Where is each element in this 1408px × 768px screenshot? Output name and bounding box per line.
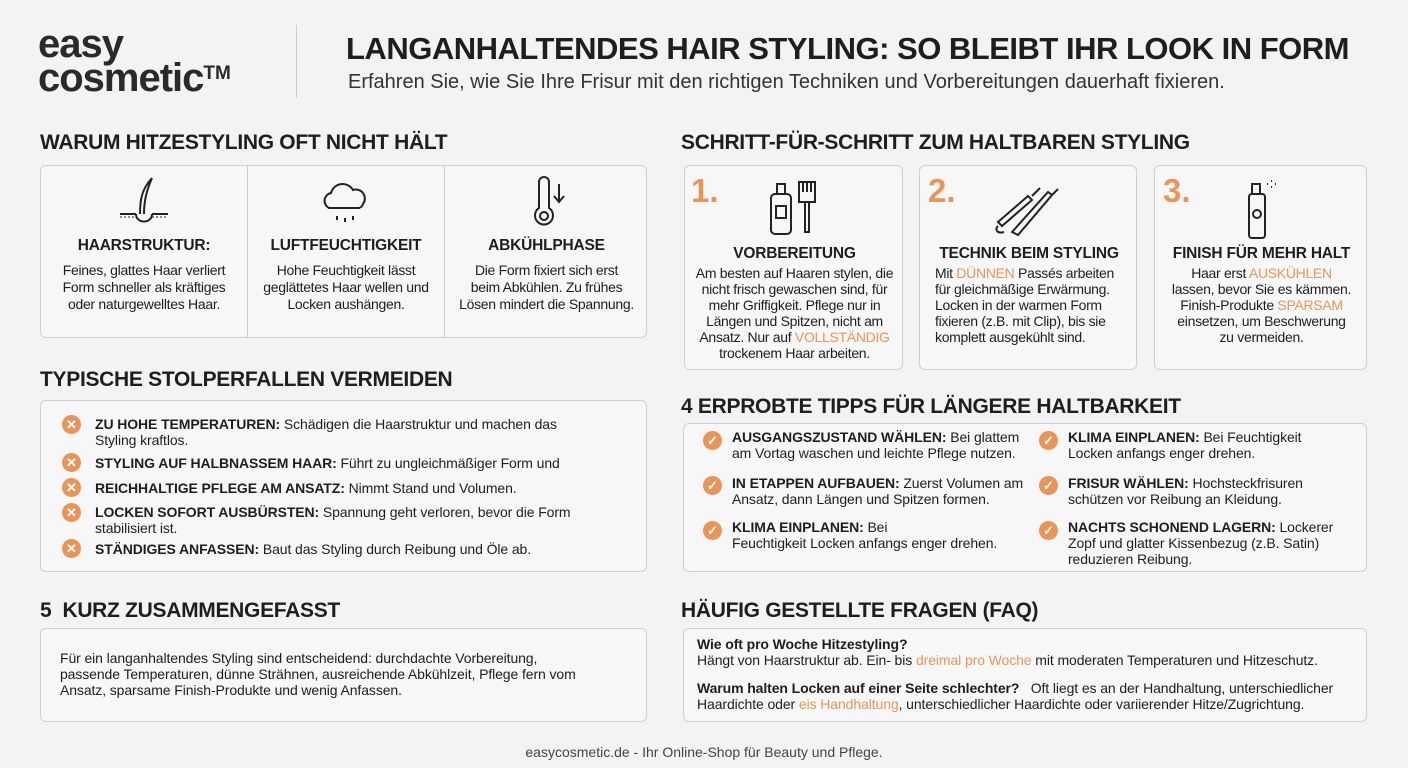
panel: stolperfallen: ZU HOHE TEMPERATUREN: Schädigen die Haarstruktur und machen das Styling kraftlos. [95,416,557,448]
text: haarstruktur [63,237,226,312]
icon: thermometer [534,176,565,226]
panel: stolperfallen: ✕ [66,505,77,520]
heading: schritt: SCHRITT-FÜR-SCHRITT ZUM HALTBAREN STYLING [681,131,1190,154]
logo: easy [38,22,123,66]
card 3: 3. [1163,172,1191,209]
panel: tipps: ✓ [1043,433,1054,448]
text: abkuehl: Die Form fixiert sich erst beim Abkühlen. Zu frühes Lösen mindert die Spannung. [459,262,634,312]
panel: stolperfallen: ✕ [66,417,77,432]
text: haarstruktur: HAARSTRUKTUR: [78,237,210,254]
panel: stolperfallen: ✕ [66,455,77,470]
text: luft: LUFTFEUCHTIGKEIT [271,237,421,254]
panel: stolperfallen: STÄNDIGES ANFASSEN: Baut das Styling durch Reibung und Öle ab. [95,541,531,557]
panel: faq: Warum halten Locken auf einer Seite schlechter? Oft liegt es an der Handhaltung, unterschiedlicher Haardichte oder eis Handhaltung, unterschiedlicher Haardichte oder variierender Hitze/Zugrichtung. [697,680,1333,712]
panel: tipps: ✓ [1043,523,1054,538]
card 1: VORBEREITUNG [733,245,856,262]
text: abkuehl [459,236,634,312]
panel: tipps: ✓ [1043,478,1054,493]
text: abkuehl: ABKÜHLPHASE [488,237,605,254]
card 3: FINISH FÜR MEHR HALT [1173,245,1350,262]
card 2: Mit DÜNNEN Passés arbeiten für gleichmäßige Erwärmung. Locken in der warmen Form fixieren (z.B. mit Clip), bis sie komplett ausgekühlt sind. [935,265,1114,345]
panel: tipps: IN ETAPPEN AUFBAUEN: Zuerst Volumen am Ansatz, dann Längen und Spitzen formen. [732,475,1023,507]
panel: faq: Hängt von Haarstruktur ab. Ein- bis dreimal pro Woche mit moderaten Temperaturen und Hitzeschutz. [697,652,1318,668]
card 2 [919,165,1137,370]
title: LANGANHALTENDES HAIR STYLING: SO BLEIBT IHR LOOK IN FORM [346,31,1349,66]
panel: faq: Wie oft pro Woche Hitzestyling? [697,636,907,652]
panel: tipps: Feuchtigkeit Locken anfangs enger drehen. [732,535,997,551]
logo: cosmeticTM [38,56,231,100]
card 1: Am besten auf Haaren stylen, die nicht frisch gewaschen sind, für mehr Griffigkeit. Pflege nur in Längen und Spitzen, nicht am Ansatz. Nur auf VOLLSTÄNDIG trockenem Haar arbeiten. [696,265,893,361]
panel: kurz: Für ein langanhaltendes Styling sind entscheidend: durchdachte Vorbereitung, passende Temperaturen, dünne Strähnen, ausreichende Abkühlzeit, Pflege fern vom Ansatz, sparsame Finish-Produkte und wenig Anfassen. [60,650,576,698]
logo [38,22,231,100]
card 1: 1. [691,172,719,209]
heading: stolperfallen: TYPISCHE STOLPERFALLEN VERMEIDEN [40,368,452,391]
panel: tipps [683,423,1367,572]
panel: warum [40,165,647,338]
panel: tipps: KLIMA EINPLANEN: Bei Feuchtigkeit Locken anfangs enger drehen. [1068,429,1301,461]
panel: stolperfallen [40,400,647,572]
text: haarstruktur: Feines, glattes Haar verliert Form schneller als kräftiges oder naturgewelltes Haar. [63,262,225,312]
subtitle: Erfahren Sie, wie Sie Ihre Frisur mit den richtigen Techniken und Vorbereitungen dauerhaft fixieren. [348,71,1225,93]
panel: tipps: ✓ [707,478,718,493]
panel: tipps: NACHTS SCHONEND LAGERN: Lockerer Zopf und glatter Kissenbezug (z.B. Satin) reduzieren Reibung. [1068,519,1333,567]
panel: stolperfallen: LOCKEN SOFORT AUSBÜRSTEN: Spannung geht verloren, bevor die Form stabilisiert ist. [95,504,570,536]
panel: stolperfallen: ✕ [66,541,77,556]
panel: faq [683,628,1367,722]
icon: hair [120,177,168,222]
heading: tipps: 4 ERPROBTE TIPPS FÜR LÄNGERE HALTBARKEIT [681,395,1181,418]
panel: tipps: ✓ [707,433,718,448]
panel: stolperfallen: STYLING AUF HALBNASSEM HAAR: Führt zu ungleichmäßiger Form und [95,455,560,471]
card 3 [1154,165,1367,370]
footer: easycosmetic.de - Ihr Online-Shop für Beauty und Pflege. [525,744,883,760]
panel: tipps: KLIMA EINPLANEN: Bei [732,519,887,535]
panel: stolperfallen: ✕ [66,480,77,495]
card 3: Haar erst AUSKÜHLEN lassen, bevor Sie es kämmen. Finish-Produkte SPARSAM einsetzen, um Beschwerung zu vermeiden. [1172,265,1351,345]
text: luft [263,237,429,312]
text: luft: Hohe Feuchtigkeit lässt geglättetes Haar wellen und Locken aushängen. [263,262,429,312]
icon: spray can [1248,180,1276,239]
card 2: TECHNIK BEIM STYLING [939,245,1119,262]
heading: faq: HÄUFIG GESTELLTE FRAGEN (FAQ) [681,599,1038,622]
panel: tipps: FRISUR WÄHLEN: Hochsteckfrisuren schützen vor Reibung an Kleidung. [1068,475,1303,507]
card 1 [684,165,903,370]
heading: warum: WARUM HITZESTYLING OFT NICHT HÄLT [40,131,447,154]
icon: bottle brush [770,181,816,235]
icon: irons [995,187,1059,236]
heading: kurz: 5 KURZ ZUSAMMENGEFASST [40,599,340,622]
card 2: 2. [928,172,956,209]
panel: kurz [40,628,647,722]
panel: tipps: AUSGANGSZUSTAND WÄHLEN: Bei glattem am Vortag waschen und leichte Pflege nutzen. [732,429,1019,461]
panel: tipps: ✓ [707,523,718,538]
icon: cloud [324,183,366,222]
panel: stolperfallen: REICHHALTIGE PFLEGE AM ANSATZ: Nimmt Stand und Volumen. [95,480,517,496]
